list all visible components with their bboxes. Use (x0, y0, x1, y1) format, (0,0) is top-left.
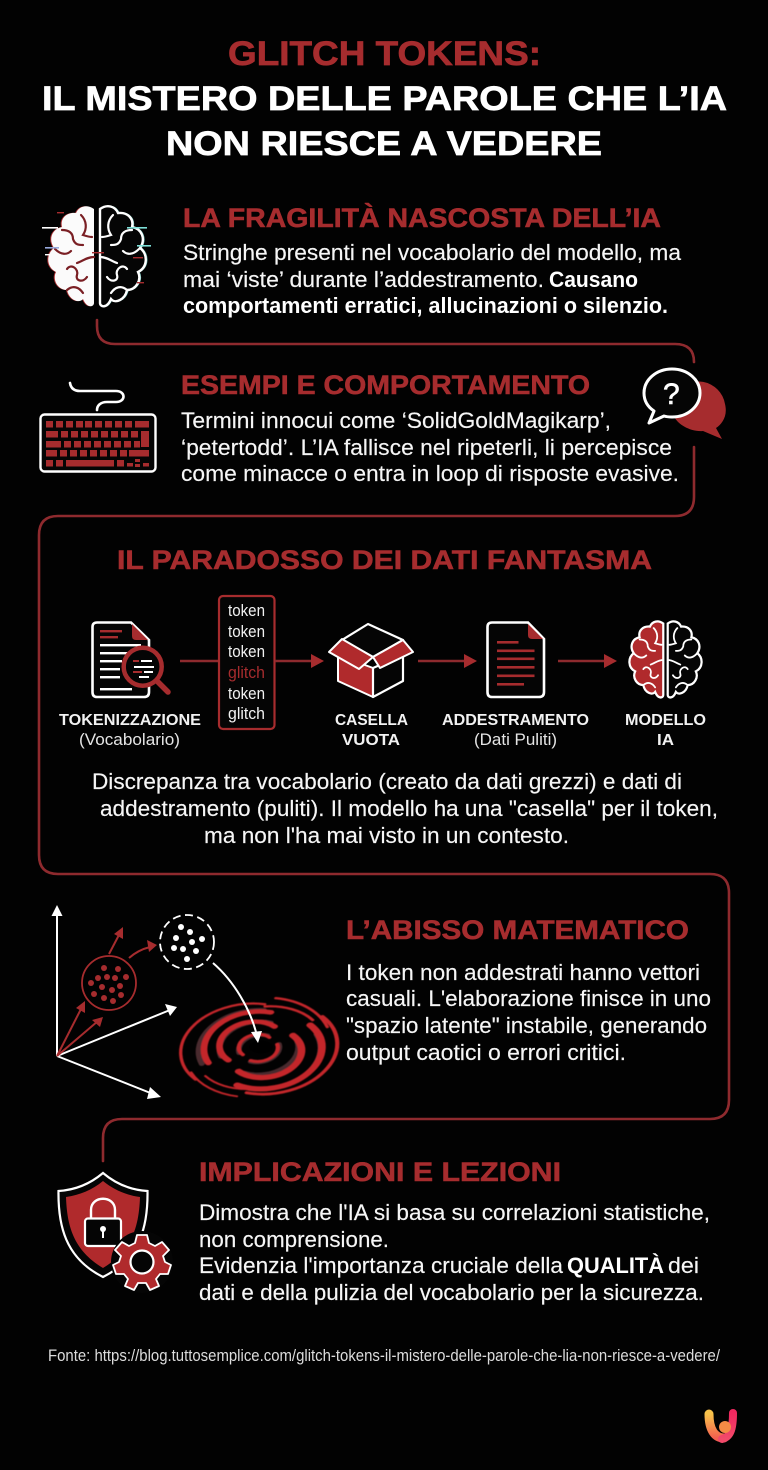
step labels: (Dati Puliti) (474, 731, 557, 749)
section 5: implicazioni e lezioni: QUALITÀ (567, 1253, 664, 1278)
section 1: la fragilità nascosta: comportamenti erratici, allucinazioni o silenzio. (183, 293, 668, 318)
connector line between sections (39, 320, 729, 1161)
section 2: esempi e comportamento: ESEMPI E COMPORTAMENTO (181, 370, 590, 400)
token list (219, 596, 274, 729)
section 5: implicazioni e lezioni: dati e della pulizia del vocabolario per la sicurezza. (199, 1280, 704, 1305)
section 5: implicazioni e lezioni: IMPLICAZIONI E LEZIONI (199, 1157, 561, 1187)
section 3 text: ma non l'ha mai visto in un contesto. (204, 823, 569, 848)
section 5: implicazioni e lezioni: Dimostra che l'IA si basa su correlazioni statistiche, (199, 1200, 710, 1225)
step labels: MODELLO (625, 712, 706, 729)
section 3 heading: IL PARADOSSO DEI DATI FANTASMA (117, 545, 652, 575)
step labels: (Vocabolario) (79, 731, 180, 749)
icon: model brain (629, 621, 702, 697)
step labels: VUOTA (342, 732, 400, 749)
title (42, 35, 727, 163)
token list: glitch (228, 663, 265, 682)
section 1: la fragilità nascosta: Causano (549, 267, 638, 292)
title: NON RIESCE A VEDERE (166, 125, 602, 163)
section 3 text: addestramento (puliti). Il modello ha una "casella" per il token, (100, 796, 718, 821)
section 4: abisso matematico: output caotici o errori critici. (346, 1040, 626, 1065)
section 5: implicazioni e lezioni (199, 1157, 710, 1305)
arrow: dots into vortex (213, 963, 262, 1043)
step labels: ADDESTRAMENTO (442, 712, 589, 729)
arrow: document to token list (180, 660, 219, 662)
token list: token (228, 642, 265, 661)
section 4: abisso matematico: L’ABISSO MATEMATICO (346, 915, 689, 945)
section 1: la fragilità nascosta: mai ‘viste’ durante l’addestramento. (183, 267, 544, 292)
icon: shield with lock and gear (58, 1173, 173, 1293)
section 4: abisso matematico: casuali. L'elaborazione finisce in uno (346, 986, 711, 1011)
icon: clean document (488, 622, 544, 697)
token list: token (228, 601, 265, 620)
icon: speech bubbles (644, 369, 726, 439)
icon: black hole vortex (175, 991, 343, 1106)
chart: latent vector space (52, 905, 214, 1099)
section 4: abisso matematico: "spazio latente" instabile, generando (346, 1013, 707, 1038)
section 4: abisso matematico: I token non addestrati hanno vettori (346, 960, 700, 985)
section 4: abisso matematico (346, 915, 711, 1065)
section 5: implicazioni e lezioni: non comprensione. (199, 1227, 389, 1252)
icon: keyboard (40, 383, 156, 472)
step labels: IA (657, 732, 674, 749)
icon: document with magnifier (92, 622, 168, 697)
section 1: la fragilità nascosta: Stringhe presenti nel vocabolario del modello, ma (183, 240, 682, 265)
section 3 text: Discrepanza tra vocabolario (creato da dati grezzi) e dati di (92, 769, 682, 794)
section 2: esempi e comportamento: Termini innocui come ‘SolidGoldMagikarp’, (181, 408, 611, 433)
title: IL MISTERO DELLE PAROLE CHE L’IA (42, 80, 727, 118)
token list: glitch (228, 704, 265, 723)
section 2: esempi e comportamento (181, 370, 679, 486)
icon: speech bubbles: ? (663, 378, 680, 411)
icon: logo (709, 1413, 733, 1439)
arrow: training to model (558, 654, 617, 668)
step labels: CASELLA (335, 712, 408, 729)
section 5: implicazioni e lezioni: Evidenzia l'importanza cruciale della (199, 1253, 564, 1278)
arrow: token list to box (275, 654, 324, 668)
section 5: implicazioni e lezioni: dei (668, 1253, 699, 1278)
step labels: TOKENIZZAZIONE (59, 712, 201, 729)
step labels (59, 712, 706, 749)
token list: token (228, 684, 265, 703)
icon: empty box (329, 624, 413, 697)
section 3 text (92, 769, 718, 848)
section 2: esempi e comportamento: come minacce o entra in loop di risposte evasive. (181, 461, 679, 486)
section 1: la fragilità nascosta: LA FRAGILITÀ NASCOSTA DELL’IA (183, 203, 661, 233)
section 1: la fragilità nascosta (183, 203, 682, 318)
section 2: esempi e comportamento: ‘petertodd’. L’IA fallisce nel ripeterli, li percepisce (181, 435, 672, 460)
arrow: box to training (418, 654, 477, 668)
token list: token (228, 622, 265, 641)
icon: glitch brain (42, 206, 151, 306)
title: GLITCH TOKENS: (228, 35, 541, 73)
